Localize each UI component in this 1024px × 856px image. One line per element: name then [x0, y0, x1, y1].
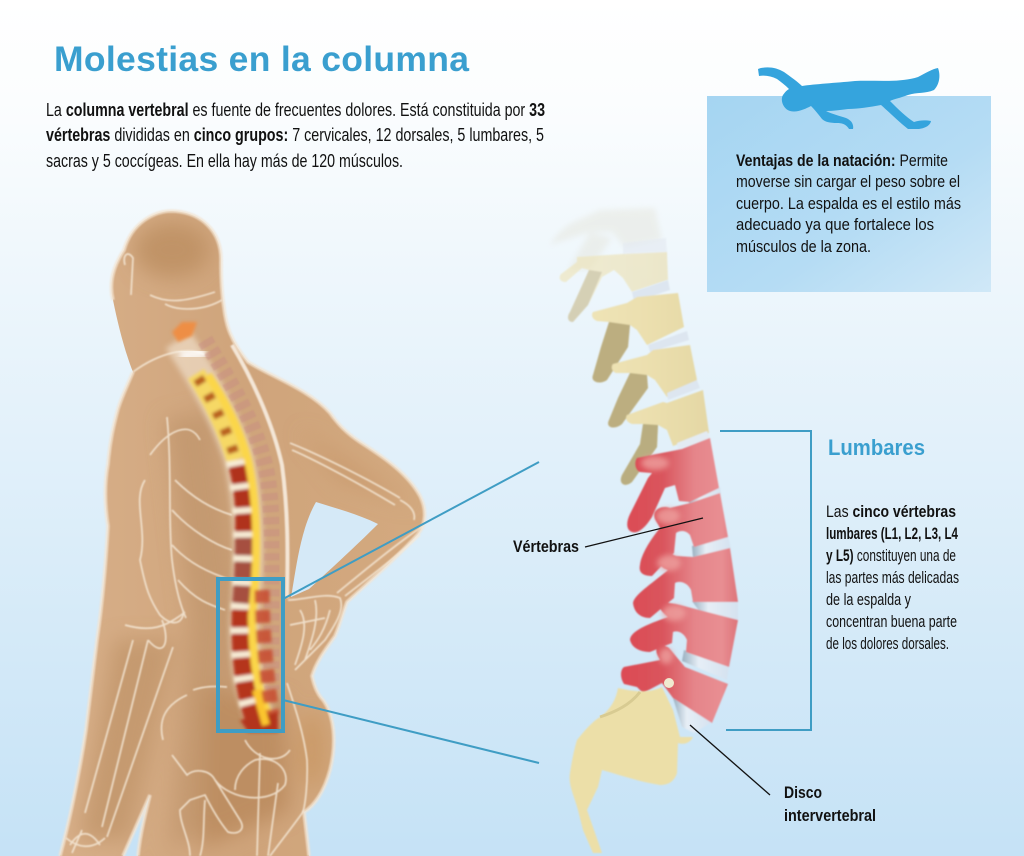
label: vertebras: [513, 518, 703, 556]
intro text block: sacras y 5 coccígeas. En ella hay más de 120 músculos.: [46, 151, 403, 171]
label: disco intervertebral: [690, 725, 876, 825]
disc L2-L3: [692, 536, 731, 558]
spine glow: [178, 340, 262, 722]
L1: [627, 438, 719, 532]
lumbar text block: de la espalda y: [826, 590, 911, 609]
callout text: cuerpo. La espalda es el estilo más: [736, 194, 961, 213]
lumbar text block: de los dolores dorsales.: [826, 634, 949, 653]
label: disco intervertebral: Disco: [784, 783, 822, 802]
label: vertebras: Vértebras: [513, 537, 579, 556]
sacrum: [570, 687, 693, 853]
spine: vertebral bodies and nerve: [196, 374, 278, 732]
cervical vertebra: [560, 238, 668, 322]
background gap between arm and back: [291, 502, 378, 597]
callout text: adecuado ya que fortalece los: [736, 215, 934, 234]
body shading: [78, 218, 368, 849]
lobe highlights: [641, 456, 686, 664]
human body figure: [50, 200, 440, 856]
body outline glow: [60, 211, 425, 856]
callout text: músculos de la zona.: [736, 237, 871, 256]
intro text block: [46, 100, 545, 171]
lumbar text block: lumbares (L1, L2, L3, L4: [826, 524, 958, 543]
disc L4-L5: [682, 650, 729, 680]
L4: [630, 603, 738, 667]
L5: [621, 646, 728, 723]
intro text block: vértebras divididas en cinco grupos: 7 cervicales, 12 dorsales, 5 lumbares, 5: [46, 125, 544, 145]
intro text block: La columna vertebral es fuente de frecuentes dolores. Está constituida por 33: [46, 100, 545, 120]
lumbar vertebrae: [621, 438, 738, 733]
icon: swimmer: [758, 67, 939, 129]
L2: [640, 493, 728, 576]
callout text: moverse sin cargar el peso sobre el: [736, 172, 960, 191]
lumbar text block: las partes más delicadas: [826, 568, 959, 587]
spine: cervical orange: [172, 322, 197, 342]
callout text: Ventajas de la natación: Permite: [736, 151, 948, 170]
lumbar text block: concentran buena parte: [826, 612, 957, 631]
thoracic vertebrae: [592, 280, 710, 485]
callout text: [736, 151, 961, 256]
skeleton lines: [66, 254, 423, 856]
title: Molestias en la columna: [54, 39, 469, 79]
lumbar highlight box: [218, 579, 283, 731]
heading: lumbares: Lumbares: [828, 435, 925, 460]
disc L5-S1: [673, 698, 712, 733]
L3: [633, 548, 738, 618]
spine detail: [550, 208, 738, 853]
lumbar bracket: [720, 431, 811, 730]
spine: processes: [205, 340, 272, 690]
panel: swimming callout: [707, 67, 991, 292]
connector line bottom: [283, 700, 539, 763]
label: disco intervertebral: intervertebral: [784, 806, 876, 825]
disc L1-L2: [688, 487, 721, 506]
lumbar text block: [826, 502, 959, 653]
back white line: [232, 345, 287, 598]
lumbar text block: y L5) constituyen una de: [826, 546, 956, 565]
faded cervical vertebrae: [550, 208, 662, 270]
disc L3-L4: [692, 601, 738, 620]
lumbar text block: Las cinco vértebras: [826, 502, 956, 521]
connector line top: [283, 462, 539, 599]
